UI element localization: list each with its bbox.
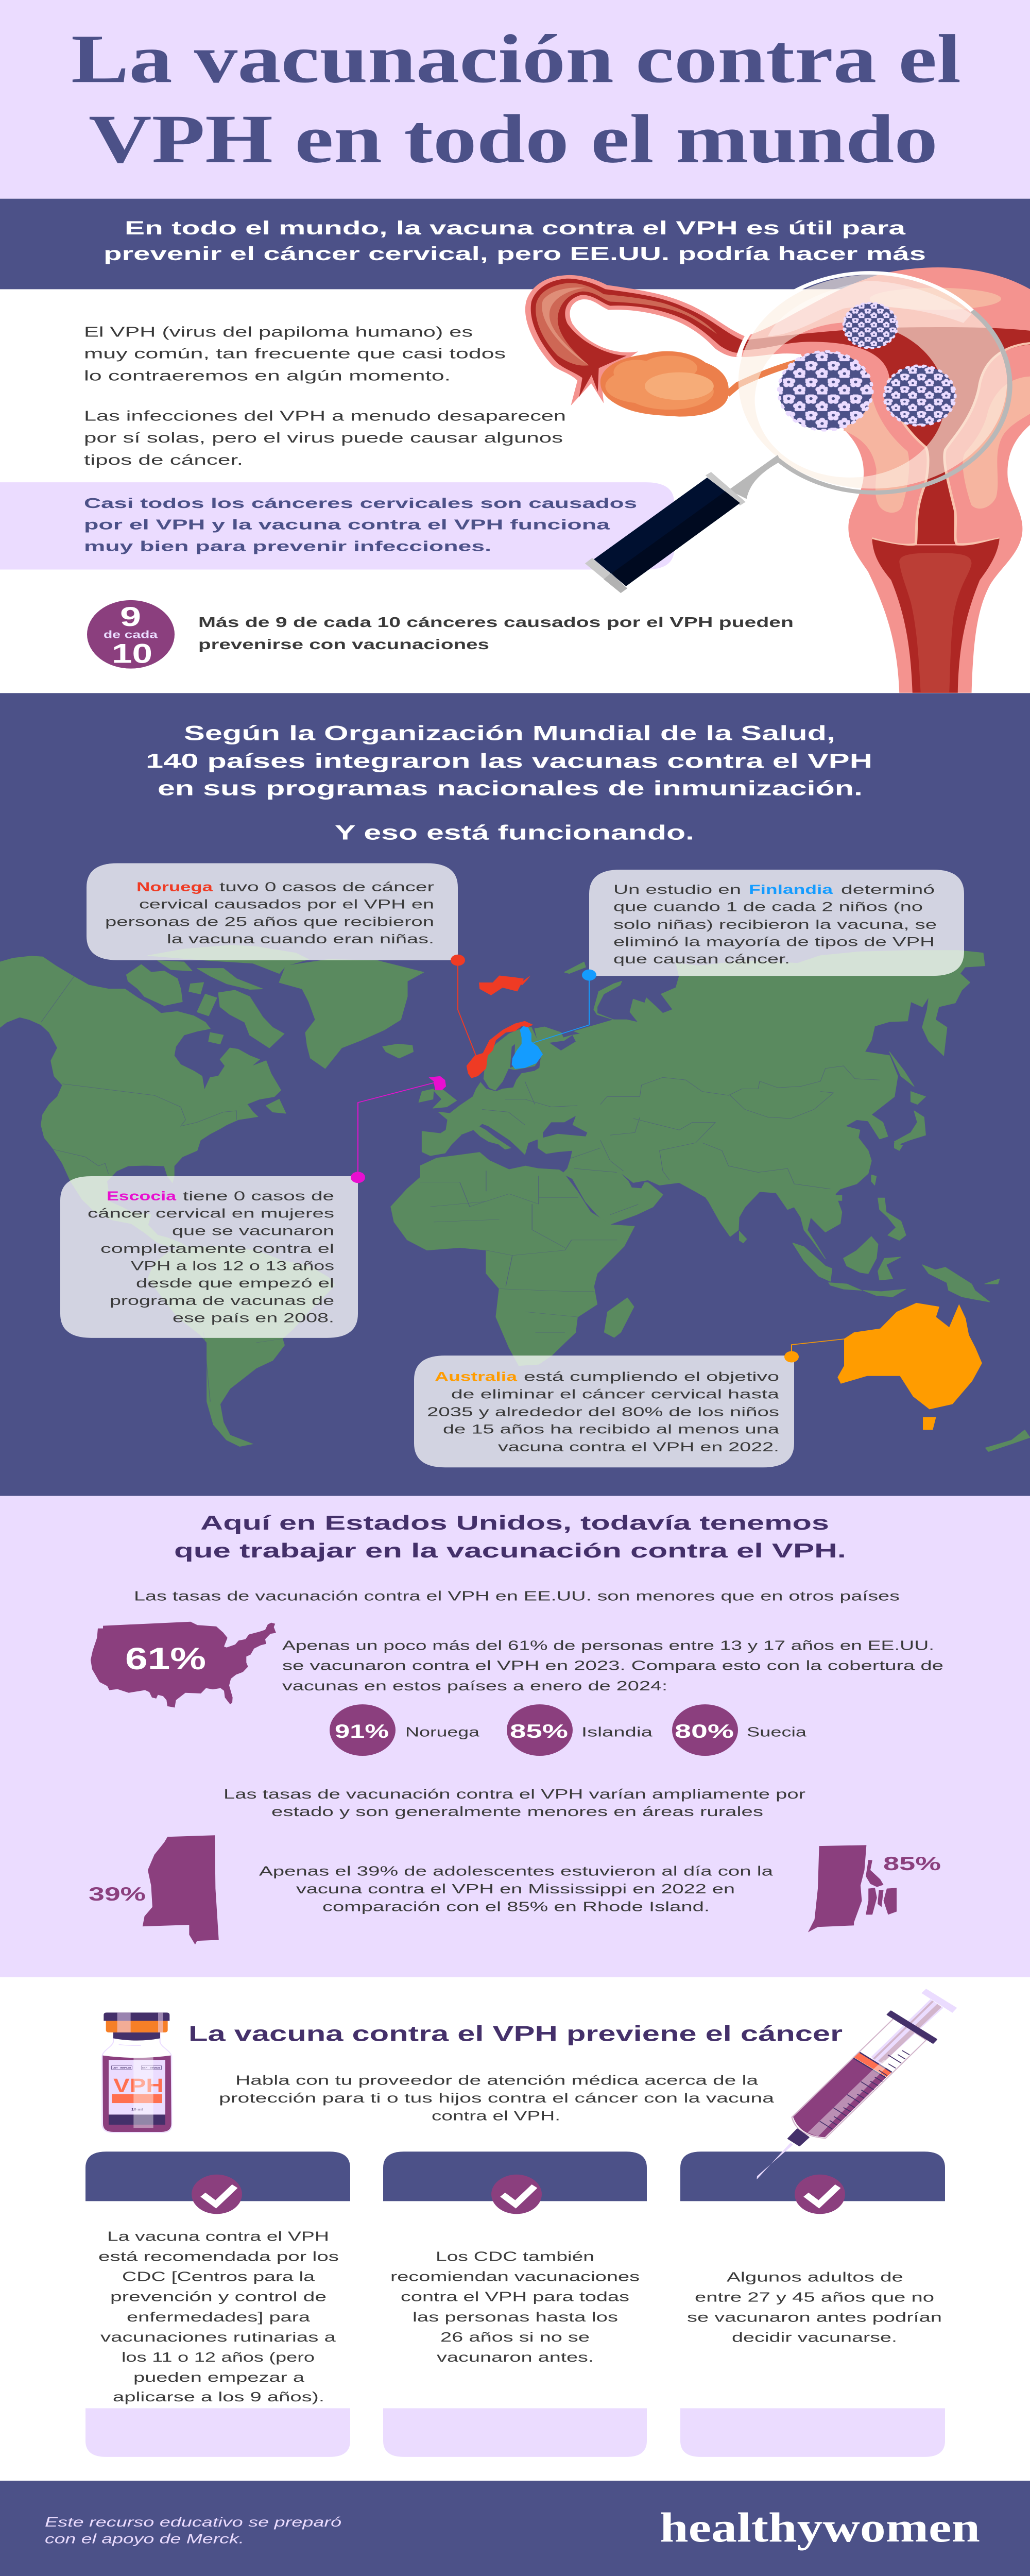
card text: Los CDC también (436, 2249, 594, 2264)
text: talk to provider: contra el VPH. (432, 2109, 560, 2123)
text: state comparison: comparación con el 85% en Rhode Island. (322, 1900, 710, 1914)
card text: está recomendada por los (98, 2249, 339, 2264)
text: state variation intro: estado y son generalmente menores en áreas rurales (271, 1805, 763, 1819)
callout: Finland: eliminó la mayoría de tipos de VPH (613, 935, 935, 949)
card text: decidir vacunarse. (732, 2330, 897, 2345)
icon: USA map with 61%: 61% (125, 1641, 206, 1676)
callout: Finland: Finlandia (749, 883, 833, 897)
heading: United States (174, 1512, 846, 1562)
subtitle heading (104, 217, 926, 265)
stat: Iceland 85% (507, 1704, 653, 1756)
text block: intro paragraph 1: El VPH (virus del papiloma humano) es (84, 324, 473, 340)
text: footer credit: con el apoyo de Merck. (45, 2532, 244, 2547)
card text: se vacunaron antes podrían (687, 2310, 942, 2325)
panel: subtitle band (0, 199, 1030, 289)
stat: Norway 91%: 91% (335, 1721, 389, 1742)
card text: La vacuna contra el VPH (107, 2229, 329, 2244)
uterus body (742, 267, 1030, 693)
map: Eurasia (422, 951, 1000, 1302)
stat text: Más de 9 de cada 10 cánceres causados por el VPH pueden (198, 615, 794, 630)
card text: entre 27 y 45 años que no (695, 2290, 934, 2305)
stat: 9 de cada 10 badge: de cada (104, 629, 158, 640)
connector: Australia (784, 1338, 847, 1362)
vaginal canal (872, 538, 1000, 693)
stat: 9 de cada 10 badge: 9 (120, 601, 141, 632)
stat: Norway 91%: Noruega (405, 1725, 480, 1740)
callout: Australia: 2035 y alrededor del 80% de los niños (427, 1405, 779, 1419)
text block: intro paragraph 2: por sí solas, pero el virus puede causar algunos (84, 430, 563, 446)
heading: WHO statement: 140 países integraron las vacunas contra el VPH (146, 750, 872, 772)
panel: footer background (0, 2481, 1030, 2576)
card text: recomiendan vacunaciones (390, 2269, 640, 2284)
callout: Scotland: completamente contra el (100, 1242, 334, 1256)
icon: vaccine vial: VPH (113, 2075, 164, 2097)
callout: Australia: está cumpliendo el objetivo (524, 1370, 779, 1384)
callout: Scotland: cáncer cervical en mujeres (88, 1207, 334, 1221)
callout: Australia: de 15 años ha recibido al menos una (443, 1422, 779, 1437)
panel: world section background (0, 693, 1030, 1496)
map: Americas and Greenland (0, 945, 457, 1248)
stat: Sweden 80%: Suecia (747, 1725, 807, 1740)
callout: Australia: vacuna contra el VPH en 2022. (498, 1440, 779, 1454)
card text: las personas hasta los (413, 2310, 618, 2325)
card text (390, 2249, 640, 2365)
callout: Finland: que cuando 1 de cada 2 niños (no (613, 900, 923, 914)
text: state comparison (259, 1864, 774, 1914)
heading: United States: que trabajar en la vacunación contra el VPH. (174, 1539, 846, 1562)
world map (0, 945, 1030, 1452)
callout: Australia (414, 1355, 794, 1467)
icon: vaccine vial (102, 2012, 171, 2132)
card text: vacunaciones rutinarias a (100, 2330, 336, 2345)
callout: Finland: Un estudio en (613, 883, 741, 897)
card text: CDC [Centros para la (122, 2269, 315, 2284)
text: footer credit (45, 2515, 341, 2547)
card text: 26 años si no se (440, 2330, 590, 2345)
stat: Iceland 85%: Islandia (581, 1725, 653, 1740)
heading: WHO statement: Según la Organización Mundial de la Salud, (184, 722, 835, 744)
panel: card 2 (383, 2151, 647, 2457)
text: state variation intro: Las tasas de vacunación contra el VPH varían ampliamente por (224, 1787, 805, 1802)
text block: intro paragraph 1: muy común, tan frecuente que casi todos (84, 346, 506, 362)
text: USA coverage paragraph: Apenas un poco más del 61% de personas entre 13 y 17 años en EE.UU. (282, 1638, 934, 1653)
map: seas and borders (482, 1035, 880, 1215)
card text (98, 2229, 339, 2404)
icon: Rhode Island with 85% (808, 1845, 941, 1932)
icon: check (192, 2175, 242, 2214)
card text: vacunaron antes. (437, 2350, 594, 2365)
text block: intro paragraph 2: tipos de cáncer. (84, 452, 243, 468)
text: state comparison: vacuna contra el VPH en Mississippi en 2022 en (296, 1882, 735, 1896)
icon: Mississippi with 39%: 39% (89, 1884, 146, 1905)
callout: Scotland: ese país en 2008. (173, 1311, 334, 1325)
callout: Norway: la vacuna cuando eran niñas. (167, 932, 434, 946)
title: La vacunación contra el (71, 21, 961, 97)
stat: Norway 91% (330, 1704, 480, 1756)
stat: 9 de cada 10 badge: 10 (112, 638, 152, 669)
country: Svalbard (479, 976, 530, 995)
stat: Sweden 80% (672, 1704, 807, 1756)
callout: Scotland: tiene 0 casos de (183, 1189, 334, 1204)
callout: Finland: determinó (841, 883, 935, 897)
icon: vaccine vial: 005FL38 (120, 2067, 131, 2070)
card text: pueden empezar a (133, 2370, 305, 2385)
callout: Finland: que causan cáncer. (613, 952, 790, 967)
heading: WHO statement: Y eso está funcionando. (335, 821, 694, 844)
stat text (198, 615, 794, 652)
fallopian tube (525, 275, 745, 405)
text block: intro paragraph 1 (84, 324, 506, 384)
callout: lavender highlight band (0, 482, 674, 570)
text block: intro paragraph 2 (84, 408, 566, 468)
icon: USA map with 61% (91, 1622, 276, 1707)
stat: 9 de cada 10 badge (87, 600, 175, 669)
text: talk to provider: Habla con tu proveedor de atención médica acerca de la (235, 2073, 759, 2088)
icon: vaccine vial: 10 ml (131, 2107, 143, 2111)
heading: WHO statement: en sus programas nacionales de inmunización. (158, 777, 863, 800)
text: comparison intro: Las tasas de vacunación contra el VPH en EE.UU. son menores que en otros países (134, 1589, 900, 1604)
callout: Australia: Australia (435, 1370, 518, 1384)
country: Norway (467, 1021, 533, 1078)
callout text (84, 496, 637, 554)
card text (687, 2270, 942, 2345)
connector: Norway (451, 955, 476, 1057)
heading: vaccine prevents cancer: La vacuna contra el VPH previene el cáncer (188, 2022, 843, 2046)
text block: intro paragraph 2: Las infecciones del VPH a menudo desaparecen (84, 408, 566, 424)
country: Finland (512, 1026, 543, 1069)
callout: Scotland: que se vacunaron (172, 1224, 334, 1239)
subtitle heading: En todo el mundo, la vacuna contra el VPH es útil para (125, 217, 906, 239)
text: talk to provider: protección para ti o tus hijos contra el cáncer con la vacuna (219, 2091, 775, 2106)
callout: Finland: solo niñas) recibieron la vacuna, se (613, 918, 937, 932)
callout text: Casi todos los cánceres cervicales son causados (84, 496, 637, 511)
country: Scotland (428, 1076, 446, 1090)
stat text: prevenirse con vacunaciones (198, 637, 489, 652)
callout: Finland (589, 870, 964, 976)
panel: title header background (0, 0, 1030, 199)
card text: contra el VPH para todas (401, 2290, 629, 2304)
callout: Norway (87, 863, 458, 960)
ovarian ligament (727, 363, 796, 395)
country: Australia (837, 1303, 982, 1430)
callout: Scotland: desde que empezó el (136, 1276, 334, 1291)
callout: Australia: de eliminar el cáncer cervical hasta (451, 1387, 779, 1402)
title (71, 21, 961, 177)
icon: syringe (757, 1989, 957, 2179)
connector: Finland (534, 970, 596, 1043)
card text: los 11 o 12 años (pero (122, 2350, 315, 2365)
callout: Norway: personas de 25 años que recibieron (105, 915, 434, 929)
text: state comparison: Apenas el 39% de adolescentes estuvieron al día con la (259, 1864, 774, 1879)
panel: United States section background (0, 1496, 1030, 1977)
map: Africa, South America, New Zealand (148, 1153, 1030, 1452)
callout text: muy bien para prevenir infecciones. (84, 538, 491, 554)
callout: Scotland: VPH a los 12 o 13 años (131, 1259, 334, 1274)
card text: prevención y control de (110, 2290, 327, 2304)
uterine cavity (742, 327, 1030, 544)
heading: WHO statement (146, 722, 872, 844)
text: footer credit: Este recurso educativo se preparó (45, 2515, 341, 2530)
text: state variation intro (224, 1787, 805, 1819)
illustration: uterus under magnifying glass (525, 267, 1030, 693)
callout: Norway: Noruega (136, 880, 213, 894)
ovary (600, 351, 729, 417)
card text: Algunos adultos de (727, 2270, 903, 2285)
callout: Scotland: Escocia (107, 1189, 177, 1204)
card text: enfermedades] para (127, 2310, 311, 2325)
heading: United States: Aquí en Estados Unidos, todavía tenemos (200, 1512, 829, 1534)
callout: Scotland: programa de vacunas de (110, 1294, 334, 1308)
icon: Mississippi with 39% (89, 1835, 219, 1944)
callout: Scotland (60, 1176, 358, 1338)
title: VPH en todo el mundo (89, 101, 938, 177)
logo: healthywomen: healthywomen (660, 2504, 980, 2551)
virus particles (779, 303, 955, 430)
icon: vaccine vial: LOT (113, 2067, 118, 2070)
text: USA coverage paragraph (282, 1638, 943, 1693)
stat: Iceland 85%: 85% (510, 1721, 568, 1742)
icon: vaccine vial: EXP (142, 2067, 148, 2070)
card text: aplicarse a los 9 años). (113, 2390, 324, 2404)
subtitle heading: prevenir el cáncer cervical, pero EE.UU. podría hacer más (104, 243, 926, 265)
panel: card 1 (85, 2151, 350, 2457)
panel: card 3 (680, 2151, 945, 2457)
magnifying glass handle (585, 455, 780, 593)
icon: Rhode Island with 85%: 85% (883, 1853, 941, 1874)
callout: Norway: tuvo 0 casos de cáncer (219, 880, 435, 894)
connector: Scotland (351, 1082, 435, 1183)
text: talk to provider (219, 2073, 775, 2123)
text: USA coverage paragraph: vacunas en estos países a enero de 2024: (282, 1679, 667, 1693)
text block: intro paragraph 1: lo contraeremos en algún momento. (84, 368, 451, 384)
callout: Norway: cervical causados por el VPH en (139, 897, 434, 912)
icon: vaccine vial: 09/2023 (150, 2067, 161, 2070)
icon: check (795, 2175, 845, 2214)
lens glass crescent (739, 275, 1007, 488)
lens rim (778, 311, 1010, 493)
callout text: por el VPH y la vacuna contra el VPH funciona (84, 517, 610, 533)
icon: check (491, 2175, 542, 2214)
stat: Sweden 80%: 80% (675, 1721, 734, 1742)
text: USA coverage paragraph: se vacunaron contra el VPH en 2023. Compara esto con la cobertura de (282, 1658, 943, 1673)
